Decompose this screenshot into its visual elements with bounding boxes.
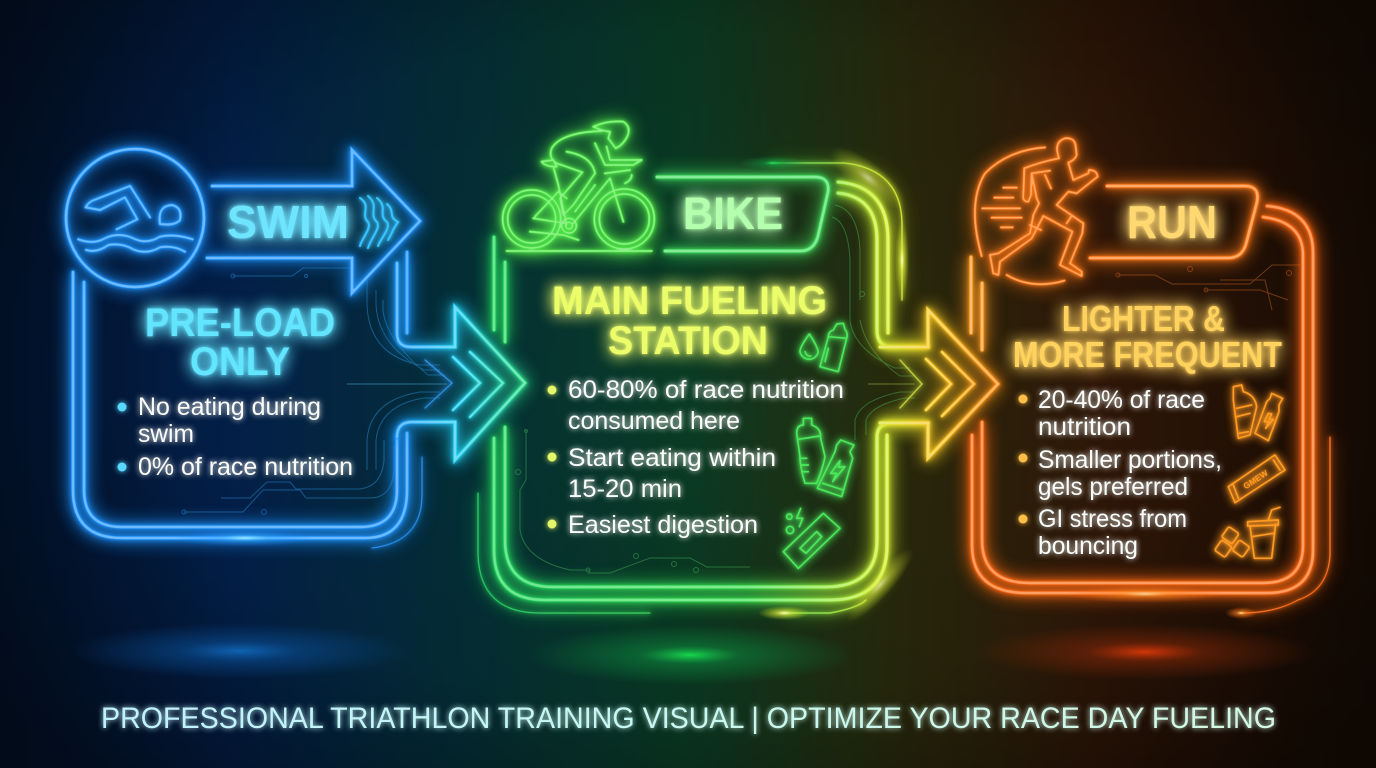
bullet list: bike: consumed here <box>568 407 740 435</box>
heading: lighter and more frequent: MORE FREQUENT <box>1013 334 1282 375</box>
heading: pre-load only <box>145 301 335 384</box>
circuit traces: swim <box>182 268 447 514</box>
sparkles: bike <box>739 137 921 629</box>
bullet list: swim: No eating during <box>138 393 321 421</box>
bullet list: bike: Easiest digestion <box>568 511 758 539</box>
heading: main fueling station <box>552 279 827 363</box>
bullet list: run: 20-40% of race <box>1038 386 1205 414</box>
bullet list: bike: Start eating within <box>568 444 776 472</box>
heading: lighter and more frequent <box>1013 298 1282 375</box>
heading: bike: BIKE <box>683 188 783 239</box>
bullet list: swim: swim <box>138 420 194 448</box>
icons: run nutrition <box>1215 385 1285 558</box>
panel outline: run <box>971 206 1330 613</box>
bullet list: swim <box>118 393 353 481</box>
sparkles: run <box>1065 585 1257 619</box>
icons: run nutrition: GMEW <box>1241 468 1270 491</box>
bullet list: run: Smaller portions, <box>1038 446 1222 474</box>
footer tagline: PROFESSIONAL TRIATHLON TRAINING VISUAL | OPTIMIZE YOUR RACE DAY FUELING <box>101 702 1276 735</box>
heading: swim: SWIM <box>227 196 349 248</box>
icon: swimmer badge <box>66 149 204 287</box>
label box: run <box>1090 186 1258 258</box>
heading: lighter and more frequent: LIGHTER & <box>1062 298 1225 339</box>
bullet list: run <box>1018 386 1222 560</box>
bullet list: run: bouncing <box>1038 532 1138 560</box>
bullet list: bike <box>548 376 844 539</box>
label arrow: swim <box>207 150 420 293</box>
circuit traces: bike <box>516 205 915 573</box>
heading: pre-load only: PRE-LOAD <box>145 301 335 345</box>
icon: runner <box>975 138 1098 284</box>
panel outline: swim <box>73 252 422 548</box>
floor glow: swim <box>70 623 410 679</box>
bullet list: swim: 0% of race nutrition <box>138 453 353 481</box>
bullet list: run: nutrition <box>1038 413 1131 441</box>
icon: cyclist <box>503 121 654 251</box>
bullet list: bike: 15-20 min <box>568 475 682 503</box>
circuit traces: run <box>1116 265 1300 310</box>
panel: run <box>971 206 1330 619</box>
arrow: bike to run <box>880 310 998 458</box>
floor glow: bike <box>525 625 855 685</box>
bullet list: run: GI stress from <box>1038 505 1187 533</box>
heading: main fueling station: MAIN FUELING <box>552 279 827 323</box>
bullet list: bike: 60-80% of race nutrition <box>568 376 844 404</box>
icons: bike nutrition <box>783 323 854 568</box>
panel: swim <box>73 252 447 548</box>
label box: bike <box>657 177 828 251</box>
panel: bike <box>478 137 928 629</box>
arrow: swim to bike <box>397 263 525 460</box>
swim bottom sparkle <box>175 529 315 547</box>
icon: water ripples <box>360 196 398 248</box>
heading: pre-load only: ONLY <box>190 340 290 384</box>
floor glow: run <box>975 624 1315 680</box>
heading: main fueling station: STATION <box>608 319 768 363</box>
bullet list: run: gels preferred <box>1038 473 1188 501</box>
heading: run: RUN <box>1127 196 1217 248</box>
panel outline: bike <box>478 163 928 613</box>
